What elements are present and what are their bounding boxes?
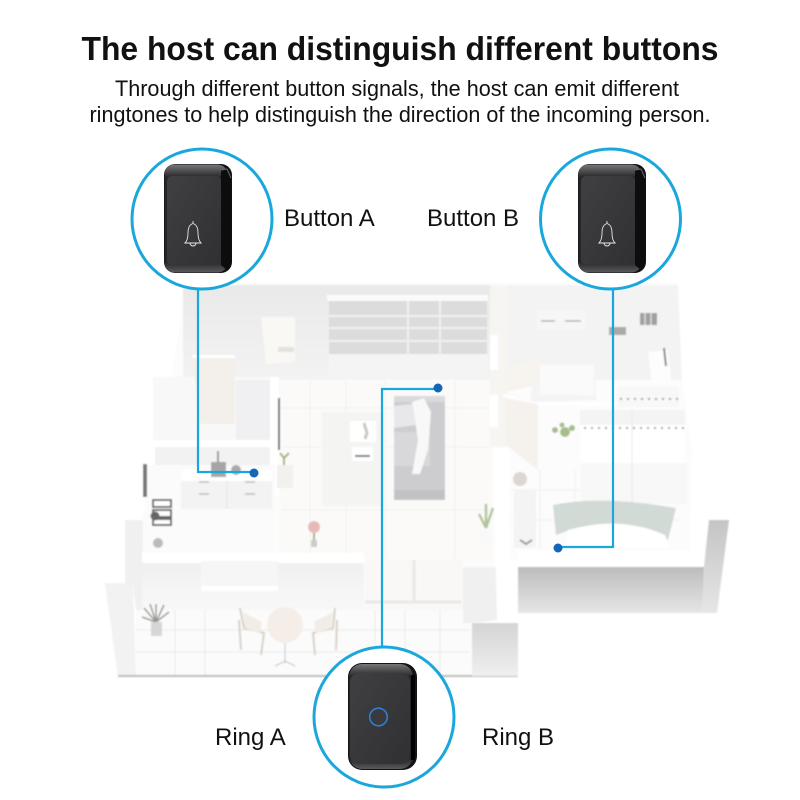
- glass door: [365, 560, 463, 610]
- bedside decor: [513, 472, 527, 486]
- subtitle text: ringtones to help distinguish the direction of the incoming person.: [90, 102, 710, 127]
- kitchen plant and flowers: [280, 453, 289, 466]
- desk: [648, 350, 672, 385]
- upper bed: [530, 362, 596, 402]
- living room rug: [322, 412, 386, 506]
- bookshelf: [327, 295, 488, 380]
- callout: button B: [540, 149, 680, 289]
- connector line: button A: [198, 289, 258, 478]
- left outer wall: [105, 280, 182, 676]
- icon: receiver device: [348, 663, 417, 770]
- terrace plant: [142, 604, 169, 636]
- living floor: [280, 381, 492, 561]
- tv stand: [352, 447, 373, 461]
- exterior wall face: [518, 567, 704, 613]
- back wall: [183, 285, 490, 380]
- floor plan illustration: [105, 280, 729, 677]
- icon: doorbell button B: [578, 164, 646, 273]
- callout: button A: [132, 149, 272, 289]
- coffee table: [350, 421, 376, 442]
- low wall: [142, 553, 364, 564]
- stove: [151, 498, 172, 526]
- tall plant: [479, 504, 493, 528]
- door curve wall: [503, 395, 620, 404]
- floor base: [105, 283, 729, 676]
- connector line: ring: [382, 384, 442, 647]
- right outer wall: [518, 283, 729, 567]
- closets: [580, 387, 687, 504]
- central divider wall: [490, 285, 508, 447]
- connector line: button B: [554, 289, 613, 552]
- terrace table and chairs: [239, 607, 337, 666]
- wall sign: [537, 310, 585, 330]
- bathroom: [153, 377, 280, 447]
- subtitle text: Through different button signals, the host can emit different: [115, 76, 679, 101]
- sofa: [394, 396, 445, 500]
- wall frames: [640, 313, 657, 325]
- label: ring A: Ring A: [215, 724, 286, 751]
- bedroom plant: [552, 422, 575, 437]
- right rooms: [510, 380, 682, 560]
- label: button A: Button A: [284, 205, 375, 232]
- terrace floor: [136, 610, 471, 675]
- icon: doorbell button A: [164, 164, 232, 273]
- label: button B: Button B: [427, 205, 519, 232]
- lower bed: [553, 501, 676, 548]
- label: ring B: Ring B: [482, 724, 554, 751]
- kitchen: [145, 465, 275, 557]
- subtitle text: [90, 76, 710, 127]
- title: The host can distinguish different buttons: [82, 30, 718, 67]
- wall art niche: [261, 317, 295, 364]
- callout: ring receiver: [314, 647, 454, 787]
